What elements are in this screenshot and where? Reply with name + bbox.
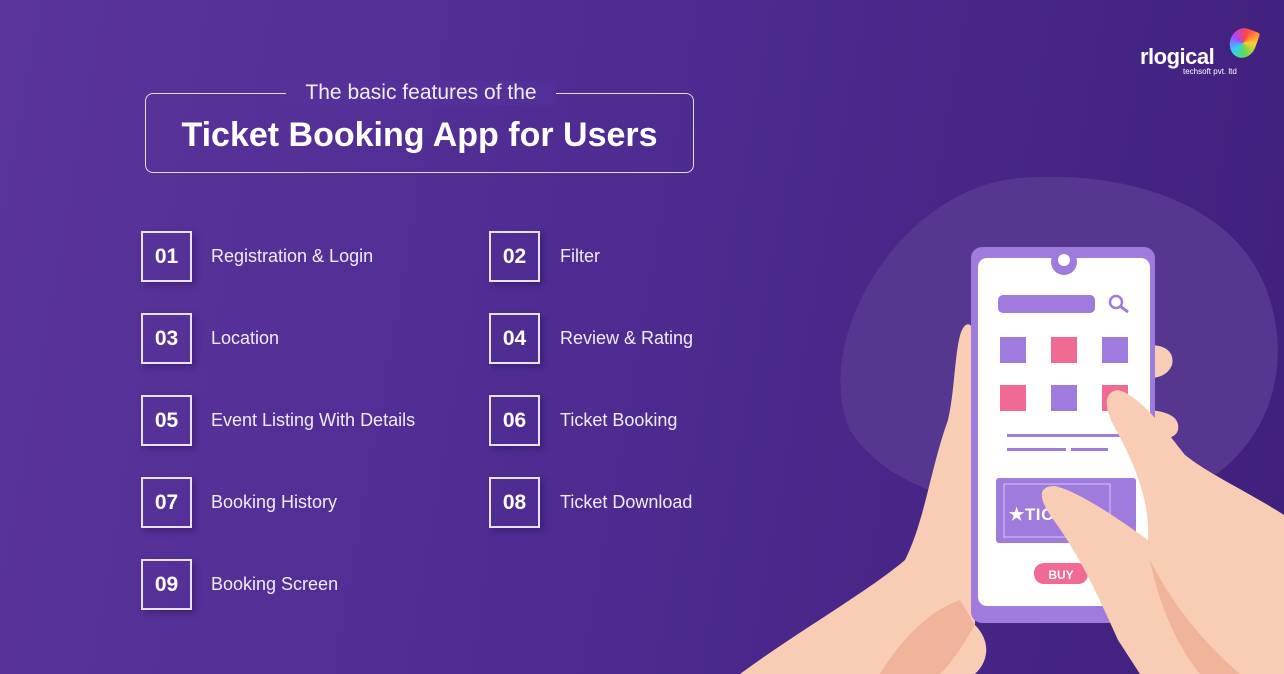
feature list: 07: [155, 490, 178, 514]
feature list: Ticket Download: [560, 492, 692, 512]
feature list: 03: [155, 326, 178, 350]
feature list: 05: [155, 408, 178, 432]
blob: [840, 177, 1278, 511]
feature list: 09: [155, 572, 178, 596]
logo: rlogical: [1140, 44, 1214, 69]
item 07: [141, 477, 337, 533]
feature list: 02: [503, 244, 526, 268]
item 05: [141, 395, 415, 451]
item 01: [141, 231, 373, 287]
feature list: [141, 231, 693, 615]
item 02: [489, 231, 600, 287]
feature list: Filter: [560, 246, 600, 266]
feature list: 08: [503, 490, 526, 514]
heading: Ticket Booking App for Users: [181, 116, 658, 154]
feature list: Booking History: [211, 492, 337, 512]
phone: [971, 247, 1155, 623]
title panel: [145, 93, 694, 173]
left hand: [740, 324, 1178, 674]
feature list: 04: [503, 326, 526, 350]
feature list: 01: [155, 244, 178, 268]
feature list: Booking Screen: [211, 574, 338, 594]
item 04: [489, 313, 693, 369]
feature list: Registration & Login: [211, 246, 373, 266]
logo: techsoft pvt. ltd: [1183, 67, 1237, 76]
subtitle: The basic features of the: [305, 81, 537, 104]
item 03: [141, 313, 279, 369]
feature list: Event Listing With Details: [211, 410, 415, 430]
item 06: [489, 395, 677, 451]
feature list: Location: [211, 328, 279, 348]
phone: ★TICKET★: [1009, 505, 1106, 524]
item 09: [141, 559, 338, 615]
phone: BUY: [1048, 568, 1074, 582]
item 08: [489, 477, 692, 533]
feature list: 06: [503, 408, 526, 432]
feature list: Review & Rating: [560, 328, 693, 348]
feature list: Ticket Booking: [560, 410, 677, 430]
right hand: [1042, 390, 1284, 674]
logo: [1140, 28, 1260, 76]
